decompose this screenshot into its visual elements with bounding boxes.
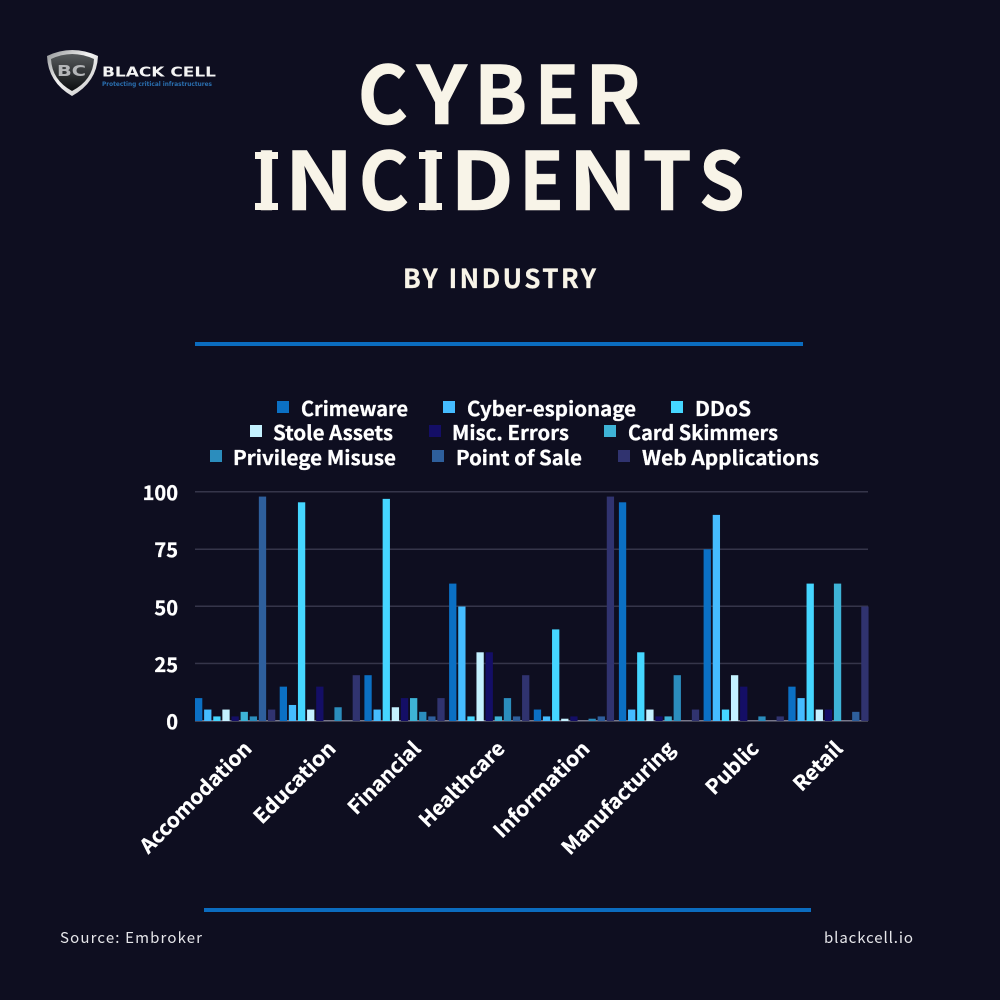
- legend: Crimeware: Crimeware: [301, 393, 408, 422]
- x axis labels: Accomodation: [131, 734, 257, 860]
- x axis labels: Healthcare: [411, 734, 510, 833]
- legend: Point of Sale: Point of Sale: [456, 442, 582, 471]
- bars: Information: [534, 497, 614, 721]
- title: B: [474, 32, 527, 148]
- x axis labels: Information: [486, 734, 595, 843]
- x axis labels: Financial: [340, 734, 426, 820]
- title: [254, 32, 745, 234]
- legend: Stole Assets: Stole Assets: [273, 417, 393, 446]
- y axis labels: [143, 477, 178, 735]
- icon: shield: [47, 50, 98, 96]
- title: C: [358, 118, 409, 234]
- legend: Card Skimmers: Card Skimmers: [628, 417, 778, 446]
- website: blackcell.io: [824, 927, 913, 948]
- x axis labels: Public: [698, 734, 764, 800]
- legend: Web Applications: Web Applications: [642, 442, 819, 471]
- title: Y: [415, 32, 468, 148]
- title: S: [699, 118, 745, 234]
- title: R: [585, 32, 642, 148]
- legend: Cyber-espionage: Cyber-espionage: [467, 393, 636, 422]
- title: D: [450, 118, 514, 234]
- bars: Healthcare: [449, 584, 529, 721]
- y axis labels: 50: [154, 592, 178, 621]
- title: T: [642, 118, 692, 234]
- legend: Misc. Errors: Misc. Errors: [452, 417, 569, 446]
- logo tagline: Protecting critical infrastructures: [102, 81, 212, 88]
- legend: [210, 393, 819, 471]
- title: C: [358, 32, 408, 148]
- y axis labels: 0: [166, 706, 178, 735]
- title: N: [284, 118, 354, 234]
- title: N: [568, 118, 638, 234]
- bottom divider: [204, 908, 811, 912]
- title: I: [419, 118, 443, 234]
- title: I: [254, 118, 278, 234]
- bars: Financial: [364, 499, 445, 721]
- bars: Accomodation: [195, 497, 275, 721]
- bars: Retail: [788, 584, 869, 721]
- title: E: [534, 32, 580, 148]
- x axis labels: [131, 734, 848, 860]
- bars: Education: [280, 502, 360, 721]
- x axis labels: Manufacturing: [554, 734, 680, 860]
- bars: Public: [704, 515, 784, 721]
- y axis labels: 75: [154, 534, 178, 563]
- logo wordmark: BLACK CELL: [102, 64, 216, 80]
- source note: Source: Embroker: [60, 927, 202, 948]
- y axis labels: 25: [154, 649, 178, 678]
- y axis labels: 100: [143, 477, 178, 506]
- top divider: [195, 342, 803, 346]
- x axis labels: Education: [246, 734, 341, 829]
- bar chart: [131, 477, 869, 860]
- logo: Black Cell: [47, 50, 216, 96]
- subtitle: BY INDUSTRY: [403, 259, 597, 296]
- legend: DDoS: [671, 393, 751, 422]
- legend: DDoS: DDoS: [695, 393, 751, 422]
- icon: shield: BC: [57, 62, 86, 80]
- legend: Privilege Misuse: Privilege Misuse: [233, 442, 396, 471]
- title: E: [519, 118, 564, 234]
- x axis labels: Retail: [785, 734, 848, 797]
- bars: Manufacturing: [619, 502, 699, 721]
